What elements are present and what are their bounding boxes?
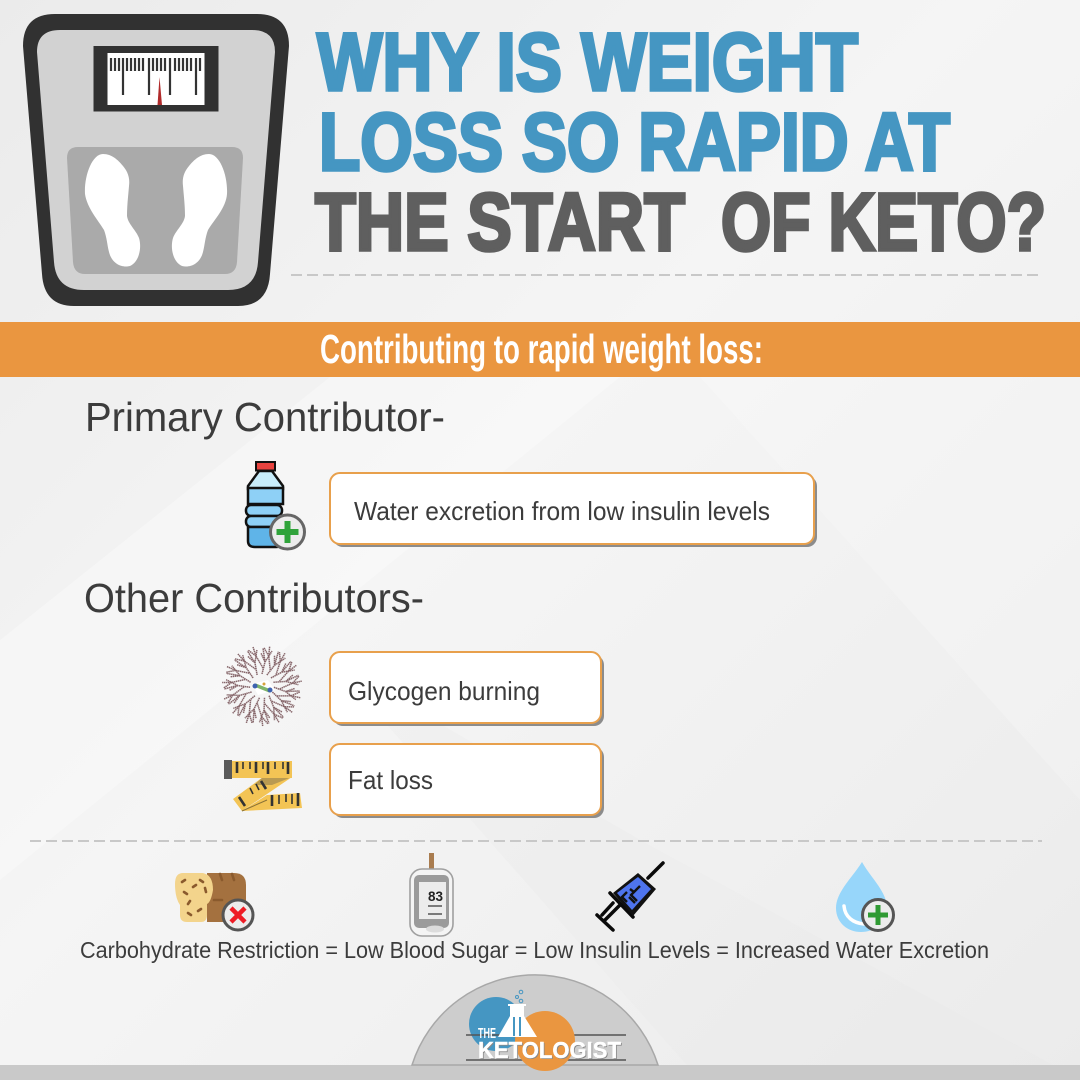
banner: contributing heading [0,322,1080,377]
icon: glycogen molecule [221,645,303,727]
callout: fat loss: Fat loss [348,765,433,795]
callout: fat loss [330,744,604,818]
icon: water bottle with plus [246,462,304,549]
heading: other contributors: Other Contributors- [84,575,424,621]
logo: The Ketologist [412,975,658,1071]
icon: glucose meter: 83 [428,888,443,904]
heading: primary contributor: Primary Contributor- [85,394,445,440]
title [315,17,1046,268]
callout: water excretion [330,473,817,547]
callout: water excretion: Water excretion from low insulin levels [354,496,770,526]
callout: glycogen burning: Glycogen burning [348,676,540,706]
title: WHY IS WEIGHT [317,17,858,108]
icon: measuring tape [224,760,302,811]
icon: syringe [597,863,663,930]
logo: The Ketologist: KETOLOGIST [478,1037,621,1063]
icon: bread with cross [175,873,253,930]
icon: glucose meter [410,853,453,936]
logo: The Ketologist: KETOLOGIST [479,1038,622,1064]
equation text: Carbohydrate Restriction = Low Blood Sugar = Low Insulin Levels = Increased Water Excretion [80,937,989,963]
callout: glycogen burning [330,652,604,726]
icon: water drop with plus [836,862,894,932]
bottom grey bar [0,1065,1080,1080]
banner: contributing heading: Contributing to rapid weight loss: [320,326,763,372]
icon: bathroom scale [23,14,289,306]
title: LOSS SO RAPID AT [319,97,950,188]
logo: The Ketologist: THE [478,1025,496,1042]
title: THE START [315,177,685,268]
